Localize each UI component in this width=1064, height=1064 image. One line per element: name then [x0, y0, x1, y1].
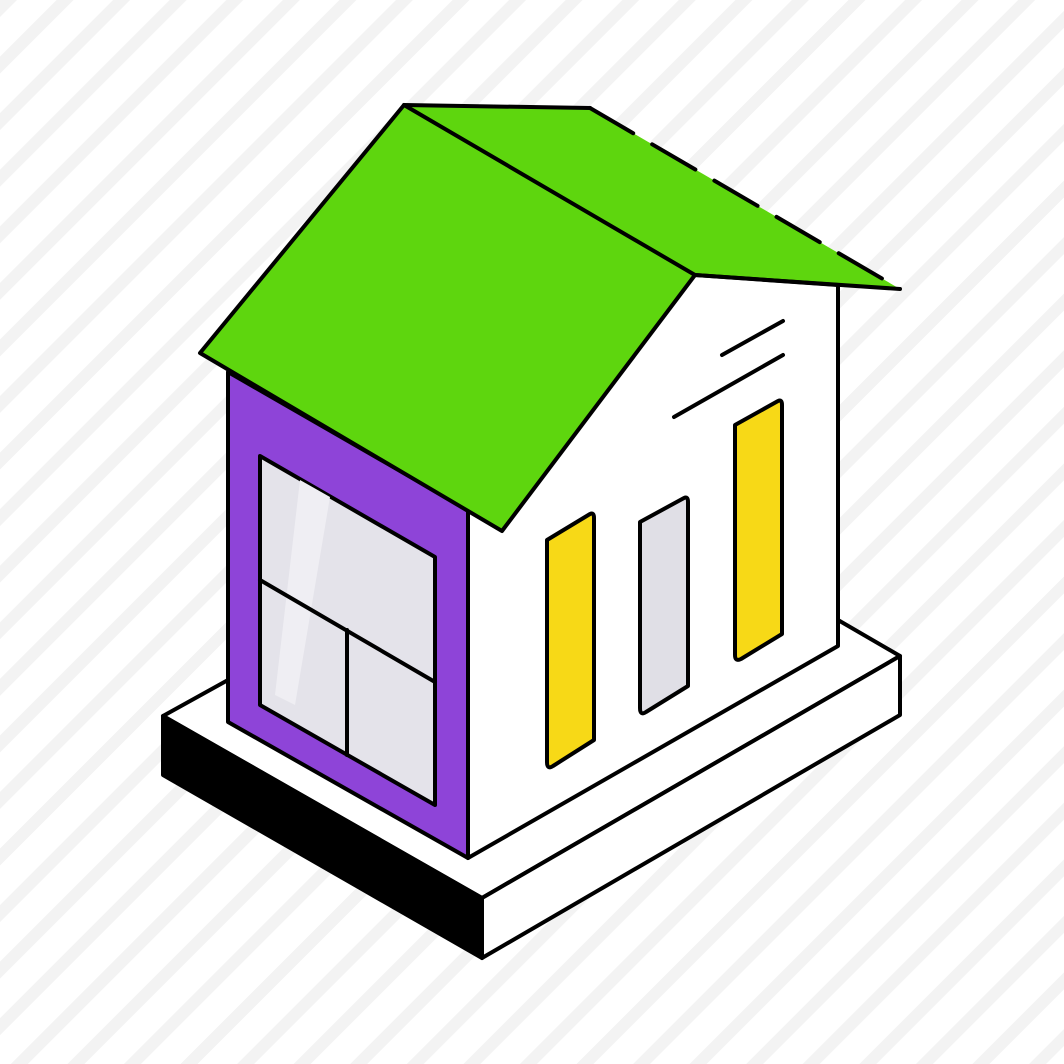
base platform	[163, 600, 900, 958]
slats	[547, 400, 782, 767]
purple wall with window	[228, 372, 468, 858]
roof front	[200, 105, 900, 531]
right wall	[468, 275, 838, 858]
back roof	[404, 105, 900, 289]
